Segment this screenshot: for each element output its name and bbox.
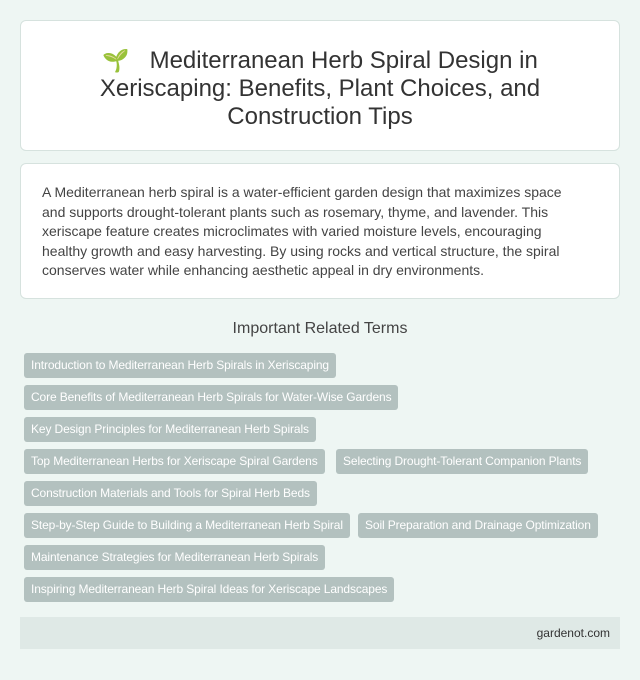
tag 3: Key Design Principles for Mediterranean Herb Spirals — [31, 422, 309, 436]
tag 1 — [24, 353, 336, 378]
tag 8 — [358, 513, 598, 538]
tag 9 — [24, 545, 325, 570]
description card — [20, 163, 620, 299]
tag 6: Construction Materials and Tools for Spiral Herb Beds — [31, 486, 310, 500]
tag 2: Core Benefits of Mediterranean Herb Spirals for Water-Wise Gardens — [31, 390, 391, 404]
tag 2 — [24, 385, 398, 410]
tag 9: Maintenance Strategies for Mediterranean Herb Spirals — [31, 550, 318, 564]
section heading: Important Related Terms — [233, 320, 407, 337]
tag 10: Inspiring Mediterranean Herb Spiral Ideas for Xeriscape Landscapes — [31, 582, 387, 596]
tag 7: Step-by-Step Guide to Building a Mediterranean Herb Spiral — [31, 518, 343, 532]
tag 8: Soil Preparation and Drainage Optimization — [365, 518, 591, 532]
description text: A Mediterranean herb spiral is a water-efficient garden design that maximizes space and supports drought-tolerant plants such as rosemary, thyme, and lavender. This xeriscape feature creates microclimates with varied moisture levels, encouraging healthy growth and easy harvesting. By using rocks and vertical structure, the spiral conserves water while enhancing aesthetic appeal in dry environments. — [42, 184, 562, 278]
tag 4: Top Mediterranean Herbs for Xeriscape Spiral Gardens — [31, 454, 318, 468]
title card — [20, 20, 620, 151]
footer — [20, 617, 620, 649]
tag 7 — [24, 513, 350, 538]
title: 🌱 Mediterranean Herb Spiral Design in Xeriscaping: Benefits, Plant Choices, and Construction Tips — [100, 47, 540, 130]
tag 5: Selecting Drought-Tolerant Companion Plants — [343, 454, 581, 468]
tag 10 — [24, 577, 394, 602]
footer: gardenot.com — [537, 626, 610, 640]
tag 6 — [24, 481, 317, 506]
tag 4 — [24, 449, 325, 474]
tag 3 — [24, 417, 316, 442]
tag 5 — [336, 449, 588, 474]
tag 1: Introduction to Mediterranean Herb Spirals in Xeriscaping — [31, 358, 329, 372]
